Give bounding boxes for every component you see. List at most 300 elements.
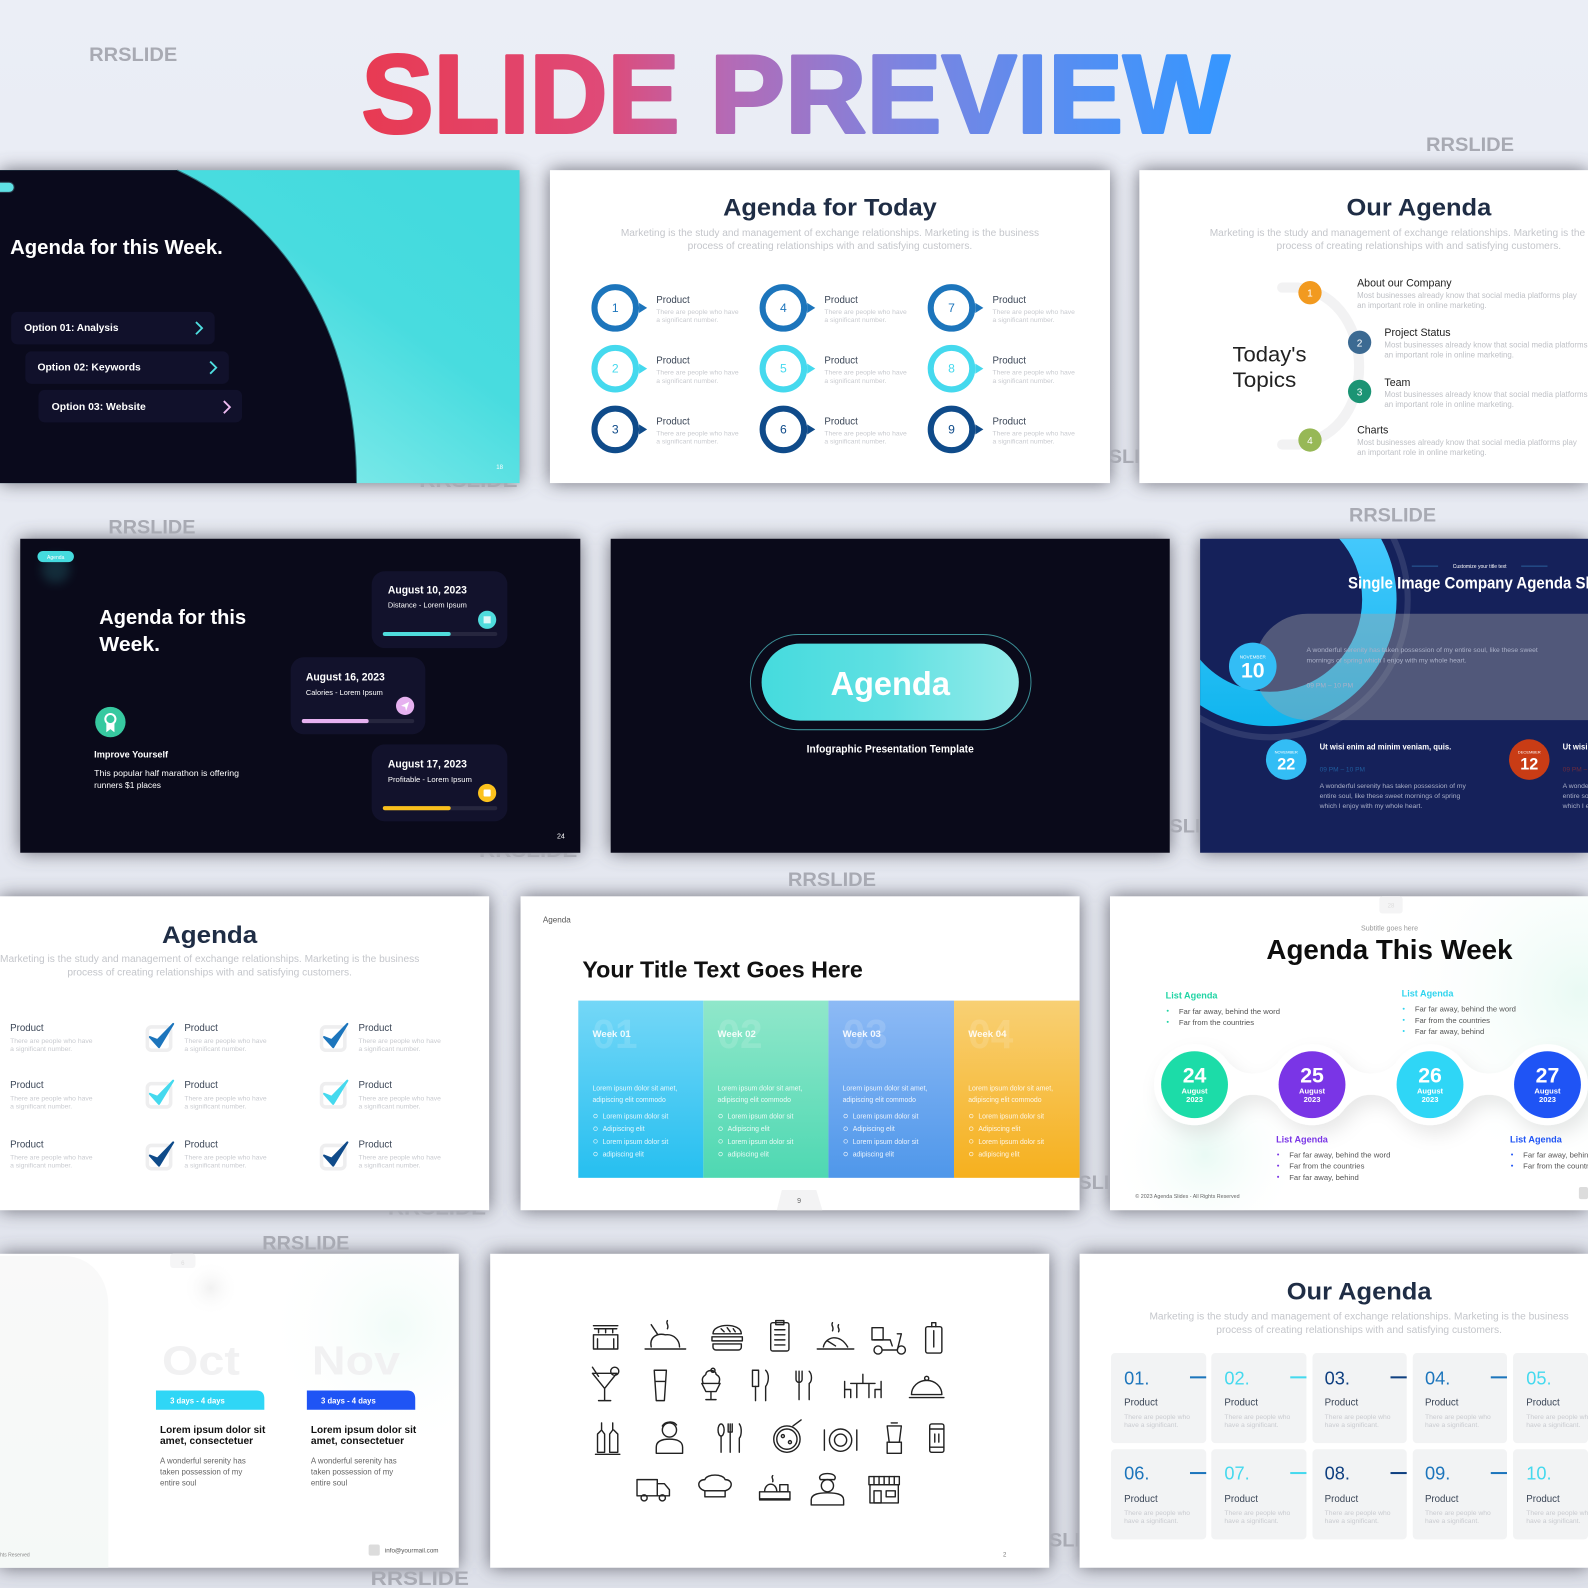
left panel [0,1256,108,1568]
topic 4 [1357,424,1577,457]
icon: ice cream [702,1368,720,1400]
column: week 04: Adipiscing elit [978,1126,1020,1133]
item 4 [763,287,907,329]
date circle 24: 2023 [1186,1095,1203,1104]
card 03 [1313,1353,1407,1443]
event text: 09 PM – 10 PM [1320,767,1365,774]
item 7: There are people who have [992,309,1075,316]
card: August 16: Calories - Lorem Ipsum [306,688,383,697]
event text [1319,741,1467,810]
subtitle [1149,1312,1569,1336]
watermark: RRSLIDE [788,869,876,891]
tab: Oct duration [156,1391,264,1410]
item with dark check: a significant number. [359,1163,421,1170]
panel: slide 1 Agenda for this Week [0,170,520,483]
heading: Agenda for this [99,606,246,629]
item 7 [931,287,1075,329]
item 5: 5 [780,362,787,376]
column: week 01: Lorem ipsum dolor sit [603,1139,668,1146]
item with cyan check: Product [184,1080,218,1091]
item 8: Product [992,356,1026,367]
card 01: There are people who [1124,1414,1190,1421]
heading: Our Agenda [1346,195,1492,222]
watermark: RRSLIDE [262,1233,349,1255]
card 07: There are people who [1224,1510,1290,1517]
option 3: Option 03: Website [52,402,146,413]
footer badge [1579,1187,1588,1199]
icon: food truck [637,1480,669,1501]
item with dark check: There are people who have [184,1155,267,1162]
option 3 [38,390,242,422]
card: August 10: August 10, 2023 [388,584,467,596]
icon: plate [824,1429,857,1451]
column: week 04: Lorem ipsum dolor sit amet, [968,1086,1053,1093]
item 1: a significant number. [656,317,718,324]
item with dark check [322,1139,441,1170]
topic 3: an important role in online marketing. [1384,400,1514,409]
list top right: Far from the countries [1415,1016,1490,1025]
column: week 01 [578,1001,703,1178]
card 03: There are people who [1325,1414,1391,1421]
item 5 [763,348,907,389]
date circle 27: 2023 [1539,1095,1556,1104]
item with dark check [147,1139,267,1170]
center label [1233,343,1306,392]
list top right: Far far away, behind [1415,1027,1484,1036]
card 02: have a significant. [1224,1422,1279,1429]
item with cyan check: a significant number. [359,1103,421,1110]
watermark behind slide: RRSLIDE [479,840,577,862]
event text: which I enjoy with my whole heart. [1319,803,1422,810]
text: Nov: A wonderful serenity has [311,1456,397,1465]
list top left: List Agenda [1166,991,1218,1001]
card 05: 05. [1526,1368,1552,1388]
item with blue check [147,1023,267,1053]
date circle 24: 24 [1183,1064,1207,1088]
option 1 [11,312,215,344]
text: Nov [311,1425,417,1488]
title: SLIDE PREVIEW: PREVIEW [710,32,1230,157]
date circle 26: August [1417,1086,1444,1095]
column: week 04 [954,1001,1080,1178]
icon: waiter [656,1422,683,1453]
item 8: There are people who have [992,370,1075,377]
item 9: There are people who have [992,430,1075,437]
item 5: a significant number. [824,378,887,385]
icon: cutlery [718,1424,741,1452]
page tab [170,1254,195,1268]
event text: entire soul, like these sweet mornings of spring [1320,793,1461,800]
item with cyan check: Product [359,1080,392,1091]
node 1 [1298,281,1322,304]
icon: award ribbon [95,707,126,737]
item 2: Product [656,356,690,367]
item 3: 3 [612,422,619,436]
column: week 03 [828,1001,954,1178]
text: Oct: A wonderful serenity has [160,1456,246,1465]
node 3 [1348,380,1371,403]
list top left: Far from the countries [1179,1018,1254,1027]
event text: A wonderful serenity has taken possession of my [1320,783,1467,790]
date: November 22: NOVEMBER [1275,749,1298,754]
subtitle: Marketing is the study and management of exchange relationships. Marketing is the business [0,954,419,965]
card: August 17 [372,744,507,821]
icon: bar counter [593,1326,618,1349]
item 5: Product [824,356,858,367]
item: Product [10,1139,44,1150]
date circle 27: 27 [1536,1064,1559,1088]
item: Product [10,1080,44,1091]
text block: improve yourself: Improve Yourself [94,750,169,761]
item 6 [763,409,907,450]
card 08: There are people who [1325,1510,1391,1517]
item 9 [931,409,1075,450]
item 3: There are people who have [656,430,739,437]
item with blue check: Product [359,1023,392,1034]
column: week 04: Lorem ipsum dolor sit [978,1114,1044,1121]
watermark behind slide: RRSLIDE [1140,815,1228,837]
card: August 10 [372,571,507,648]
footer: hts Reserved [0,1553,30,1559]
watermark: RRSLIDE [1426,134,1514,156]
card 07: have a significant. [1224,1518,1279,1525]
item 3: a significant number. [656,439,718,446]
item 2 [594,348,739,389]
featured text [1306,647,1538,690]
item with dark check: There are people who have [359,1155,441,1162]
item with blue check: a significant number. [359,1046,421,1053]
panel: slide 11 food icons [490,1254,1049,1568]
tab: Oct duration: 3 days - 4 days [170,1397,225,1406]
card 02: Product [1224,1398,1258,1409]
topic 3: Team [1384,377,1411,389]
node 1: 1 [1307,289,1313,300]
month: Oct: Oct [162,1337,240,1383]
date circle 27 [1514,1051,1581,1118]
column: week 02 [703,1001,828,1178]
text block: improve yourself [94,750,239,790]
text: Oct: amet, consectetuer [160,1436,253,1447]
card 05 [1513,1353,1588,1443]
column: week 03: adipiscing elit commodo [843,1097,916,1104]
item with cyan check: a significant number. [184,1103,246,1110]
column: week 02: Lorem ipsum dolor sit amet, [718,1086,802,1093]
card 02: There are people who [1224,1414,1290,1421]
panel: slide 4 dark agenda cards [20,539,580,853]
watermark: RRSLIDE [108,517,195,539]
item: There are people who have [10,1155,93,1162]
list bottom left: Far far away, behind [1289,1173,1359,1182]
column: week 02: adipiscing elit commodo [718,1097,791,1104]
item [10,1023,93,1053]
topic 3 [1384,377,1588,409]
list bottom left: List Agenda [1276,1134,1329,1144]
node 4: 4 [1307,436,1313,447]
card 04: have a significant. [1425,1422,1479,1429]
icon: chef [811,1474,844,1505]
card 07: 07. [1224,1464,1250,1484]
date circle 26: 2023 [1422,1095,1438,1104]
date: November 22: 22 [1277,756,1295,774]
card 08: 08. [1325,1464,1350,1484]
featured text: A wonderful serenity has taken possession of my entire soul, like these sweet [1306,647,1538,654]
watermark: RRSLIDE [1349,505,1436,527]
icon: beer glass [654,1370,666,1401]
watermark behind slide: RRSLIDE [419,470,518,492]
item 4: a significant number. [824,317,887,324]
page number: 18 [496,465,504,471]
column: week 04: Lorem ipsum dolor sit [978,1139,1044,1146]
watermark behind slide: RRSLIDE [1020,1529,1108,1551]
item: a significant number. [10,1163,72,1170]
column: week 04: adipiscing elit commodo [968,1097,1042,1104]
heading: Our Agenda [1287,1278,1432,1305]
text: Nov: amet, consectetuer [311,1436,404,1447]
item with blue check: There are people who have [184,1038,267,1045]
date circle 26: 26 [1418,1064,1442,1088]
icon: cocktail [592,1367,619,1401]
item 6: 6 [780,422,787,436]
list bottom left: Far far away, behind the word [1289,1151,1390,1160]
subtitle: Marketing is the study and management of exchange relationships. Marketing is the business [621,228,1039,239]
icon: clipboard [771,1321,789,1351]
column: week 03: Adipiscing elit [853,1126,895,1133]
card 09: 09. [1425,1464,1450,1484]
card 10 [1513,1449,1588,1539]
heading: Agenda [162,922,258,949]
item 4: There are people who have [824,309,907,316]
column: week 03: 03 [843,1011,888,1057]
page number: 2 [1003,1553,1007,1559]
text block: improve yourself: runners $1 places [94,780,161,790]
card 01: Product [1124,1398,1158,1409]
item: Product [10,1023,44,1034]
text: Nov: Lorem ipsum dolor sit [311,1425,417,1436]
subtitle: process of creating relationships with and satisfying customers. [688,241,972,252]
subtitle [0,954,419,978]
item 6: a significant number. [824,439,887,446]
card 08: have a significant. [1325,1518,1379,1525]
topic 4: Charts [1357,424,1388,436]
card: August 10: Distance - Lorem Ipsum [388,601,467,610]
icon: roast chicken [645,1321,686,1349]
item 3: Product [656,416,690,427]
card 06: 06. [1124,1464,1149,1484]
icon: burger stand [760,1476,790,1500]
text: Oct [160,1425,266,1488]
column: week 03: Lorem ipsum dolor sit [853,1139,919,1146]
caption: Infographic Presentation Template [807,743,974,755]
panel: slide 2 Agenda for Today [550,170,1110,483]
date circle 25: 25 [1300,1064,1324,1088]
card 05: Product [1526,1398,1560,1409]
card 04 [1413,1353,1507,1443]
topic 2: Project Status [1384,327,1451,339]
timeline connector [1154,1044,1588,1125]
date circle 26 [1397,1051,1463,1118]
text: Oct: Lorem ipsum dolor sit [160,1425,266,1436]
column: week 01: Adipiscing elit [603,1126,645,1133]
item 6: Product [824,416,858,427]
item 5: There are people who have [824,370,907,377]
date: November 22 [1266,739,1306,780]
date circle 25 [1279,1051,1345,1118]
column: week 02: Lorem ipsum dolor sit [728,1114,793,1121]
item: There are people who have [10,1095,93,1102]
topic 2 [1384,327,1588,360]
heading: Your Title Text Goes Here [582,956,863,982]
list top right [1402,989,1516,1036]
card 10: Product [1526,1494,1560,1505]
contact [369,1544,439,1556]
date: November 10: 10 [1241,659,1265,683]
item 1 [594,287,739,329]
date circle 24: August [1181,1086,1208,1095]
icon: delivery scooter [872,1328,905,1354]
card 02 [1211,1353,1306,1443]
column: week 04: 04 [968,1011,1014,1057]
icon: dining table [845,1374,881,1398]
icon: shop [869,1477,899,1503]
item with cyan check: There are people who have [184,1095,267,1102]
item: There are people who have [10,1038,93,1045]
card 03: 03. [1325,1368,1350,1388]
item with blue check [322,1023,441,1053]
column: week 03: Lorem ipsum dolor sit [853,1114,919,1121]
section tag: Agenda [543,916,571,925]
item 3 [594,409,739,450]
text: Oct: entire soul [160,1479,197,1488]
agenda pill: Agenda [830,666,950,703]
card 05: have a significant. [1526,1422,1581,1429]
card 06: There are people who [1124,1510,1190,1517]
item 1: Product [656,295,690,306]
card 06: have a significant. [1124,1518,1178,1525]
card 07 [1211,1449,1306,1539]
panel: slide 7 Agenda checklist [0,896,489,1210]
center label: Today's [1233,343,1306,367]
item 9: Product [992,416,1026,427]
item: a significant number. [10,1046,72,1053]
column: week 02: Adipiscing elit [728,1126,770,1133]
icon: bottles [596,1423,620,1454]
heading: Agenda This Week [1266,934,1513,965]
small title [1412,564,1547,570]
text: Oct: taken possession of my [160,1468,242,1477]
item with dark check: Product [359,1139,392,1150]
subtitle: Subtitle goes here [1361,925,1418,933]
icon: fork and knife [796,1371,811,1400]
card 09: Product [1425,1494,1459,1505]
column: week 01: Lorem ipsum dolor sit [603,1114,668,1121]
option 2: Option 02: Keywords [37,363,141,374]
page number: 24 [557,833,565,841]
subtitle [621,228,1039,252]
column: week 04: Week 04 [968,1029,1007,1040]
topic 1 [1357,278,1577,310]
card 09 [1413,1449,1507,1539]
item 8 [931,348,1075,389]
small title: Customize your title text [1453,564,1507,570]
list top right: List Agenda [1402,989,1454,999]
list top left: Far far away, behind the word [1179,1007,1280,1016]
page tab [777,1190,822,1210]
text: Nov: taken possession of my [311,1468,393,1477]
column: week 04: adipiscing elit [978,1152,1020,1159]
card 08: Product [1325,1494,1358,1505]
item 1: There are people who have [656,309,739,316]
title: SLIDE PREVIEW [362,32,1230,157]
date circle 27: August [1534,1086,1561,1095]
item 9: a significant number. [992,439,1055,446]
card: August 16 [291,657,425,734]
list bottom left [1276,1134,1390,1182]
watermark behind slide: RRSLIDE [388,1197,486,1219]
card 01: have a significant. [1124,1422,1178,1429]
list bottom right: List Agenda [1510,1134,1563,1144]
item with blue check: Product [184,1023,218,1034]
item: a significant number. [10,1103,72,1110]
date circle 25: 2023 [1304,1095,1320,1104]
date: December 12: DECEMBER [1518,749,1541,754]
panel: slide 5 Agenda title [611,539,1170,853]
list bottom left: Far from the countries [1289,1162,1365,1171]
column: week 03: adipiscing elit [853,1152,894,1159]
card 09: There are people who [1425,1510,1491,1517]
card 07: Product [1224,1494,1258,1505]
card 09: have a significant. [1425,1518,1479,1525]
page tab: 9 [797,1197,801,1205]
card: August 16: August 16, 2023 [306,672,385,684]
panel: slide 6 Single Image Company Agenda [1200,538,1588,853]
subtitle [1210,228,1588,252]
icon: blender [887,1423,901,1453]
panel: slide 9 Agenda This Week timeline [1110,896,1588,1210]
outer pill outline [750,634,1031,730]
heading [99,606,246,656]
page tab [1379,896,1403,914]
topic 4: an important role in online marketing. [1357,448,1487,457]
list top right: Far far away, behind the word [1415,1005,1516,1014]
text block: improve yourself: This popular half marathon is offering [94,768,239,778]
tag pill: Agenda [47,555,65,561]
item 6: There are people who have [824,430,907,437]
center label: Topics [1233,368,1296,392]
month: Nov: Nov [312,1337,401,1383]
featured text: mornings of spring which I enjoy with my whole heart. [1306,657,1467,664]
watermark behind slide: RRSLIDE [1080,446,1168,468]
card 03: Product [1325,1398,1358,1409]
watermark behind slide: RRSLIDE [1049,1172,1137,1194]
column: week 01: adipiscing elit commodo [592,1097,666,1104]
date: November 10 [1229,643,1277,690]
featured text: 09 PM – 10 PM [1306,683,1353,690]
date circle 24 [1161,1051,1228,1118]
list bottom right [1510,1134,1588,1171]
column: week 02: 02 [718,1011,763,1057]
item 8: 8 [948,362,955,376]
item with cyan check [322,1080,441,1110]
page tab: 28 [1388,903,1395,909]
item with dark check: Product [184,1139,218,1150]
date: December 12: 12 [1520,756,1538,774]
agenda pill [762,644,1019,721]
heading: Week. [99,633,160,656]
item with dark check: a significant number. [184,1163,246,1170]
icon: burger [712,1325,742,1350]
card 06 [1111,1449,1206,1539]
footer: © 2023 Agenda Slides - All Rights Reserved [1135,1193,1240,1200]
